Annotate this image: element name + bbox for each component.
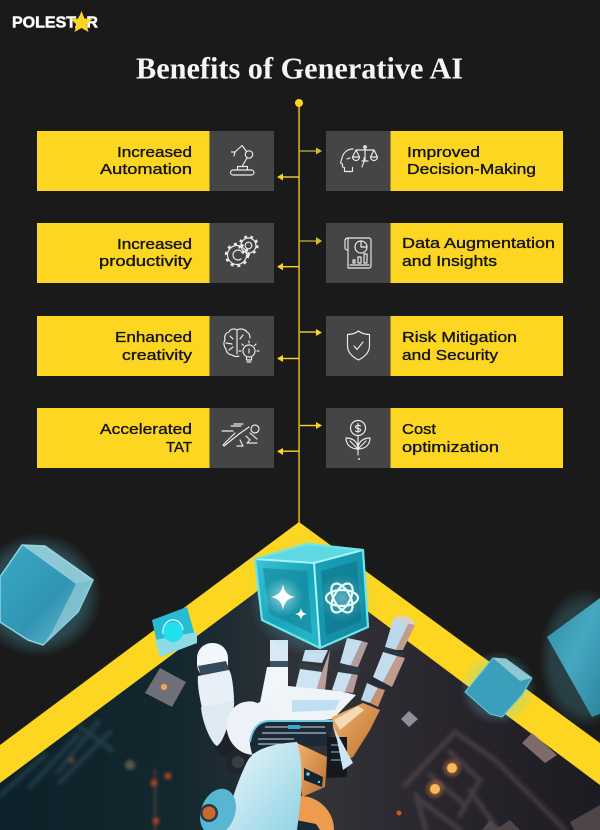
title: Benefits of Generative AI — [136, 50, 463, 86]
panel: Enhanced creativity: Enhanced — [115, 329, 192, 346]
panel: Enhanced creativity — [37, 316, 274, 376]
panel: Increased productivity: productivity — [99, 253, 193, 270]
icon: robot arm — [230, 146, 254, 175]
elbow disc — [194, 784, 242, 830]
icon: large ice cube right — [539, 588, 600, 728]
panel: Cost optimization — [326, 408, 563, 468]
panel: Increased Automation: Increased — [117, 144, 192, 161]
panel: Accelerated TAT: Accelerated — [100, 421, 192, 438]
circuit strip — [250, 722, 333, 754]
dark triangular scene background — [0, 560, 600, 830]
icon: plant with dollar coin — [346, 420, 370, 459]
panel: Increased productivity — [37, 223, 274, 283]
panel: Risk Mitigation and Security: and Security — [402, 347, 499, 364]
central timeline — [295, 99, 303, 523]
robot hand illustration — [194, 616, 415, 830]
panel: Accelerated TAT: TAT — [166, 439, 192, 456]
panel: Cost optimization: optimization — [402, 439, 499, 456]
blurred circuit background, right — [405, 732, 565, 830]
icon: small ice cube right — [460, 651, 536, 725]
panel: Increased productivity: Increased — [117, 236, 192, 253]
dark wrist joint — [327, 737, 347, 778]
arrows to the right — [300, 148, 322, 429]
panel: Increased Automation: Automation — [100, 161, 192, 178]
orange forearm with visor — [297, 743, 327, 797]
panel: Improved Decision-Making — [326, 131, 563, 191]
thumb — [197, 643, 283, 774]
icon: sprinting runner — [222, 424, 259, 446]
panel: Enhanced creativity: creativity — [122, 347, 193, 364]
icon: large ice cube left — [0, 533, 102, 657]
panel: Risk Mitigation and Security — [326, 316, 563, 376]
panel: Improved Decision-Making: Improved — [407, 144, 480, 161]
panel: Risk Mitigation and Security: Risk Mitigation — [402, 329, 517, 346]
panel: Accelerated TAT — [37, 408, 274, 468]
yellow triangle frame — [0, 522, 600, 830]
panel: Data Augmentation and Insights: Data Augmentation — [402, 235, 555, 252]
wrist orange plate — [332, 703, 380, 762]
icon: head with scales — [340, 146, 378, 172]
panel: Data Augmentation and Insights: and Insights — [402, 253, 497, 270]
icon: gears — [226, 236, 258, 266]
icon: brain and light bulb — [224, 329, 259, 362]
panel: Cost optimization: Cost — [402, 421, 437, 438]
panel: Data Augmentation and Insights — [326, 223, 563, 283]
palm — [250, 686, 356, 728]
logo: POLESTAR — [12, 14, 98, 32]
blurred circuit background, left — [0, 722, 172, 830]
icon: small teal cube left — [152, 607, 197, 657]
icon: glowing AI cube — [248, 537, 376, 657]
panel: Improved Decision-Making: Decision-Making — [407, 161, 536, 178]
icon: report with charts — [345, 238, 371, 268]
glowing lights and background squares — [145, 668, 600, 830]
arrows to the left — [277, 174, 299, 455]
panel: Increased Automation — [37, 131, 274, 191]
white forearm — [225, 742, 302, 830]
icon: shield with check — [348, 331, 370, 360]
fingers — [260, 616, 415, 707]
